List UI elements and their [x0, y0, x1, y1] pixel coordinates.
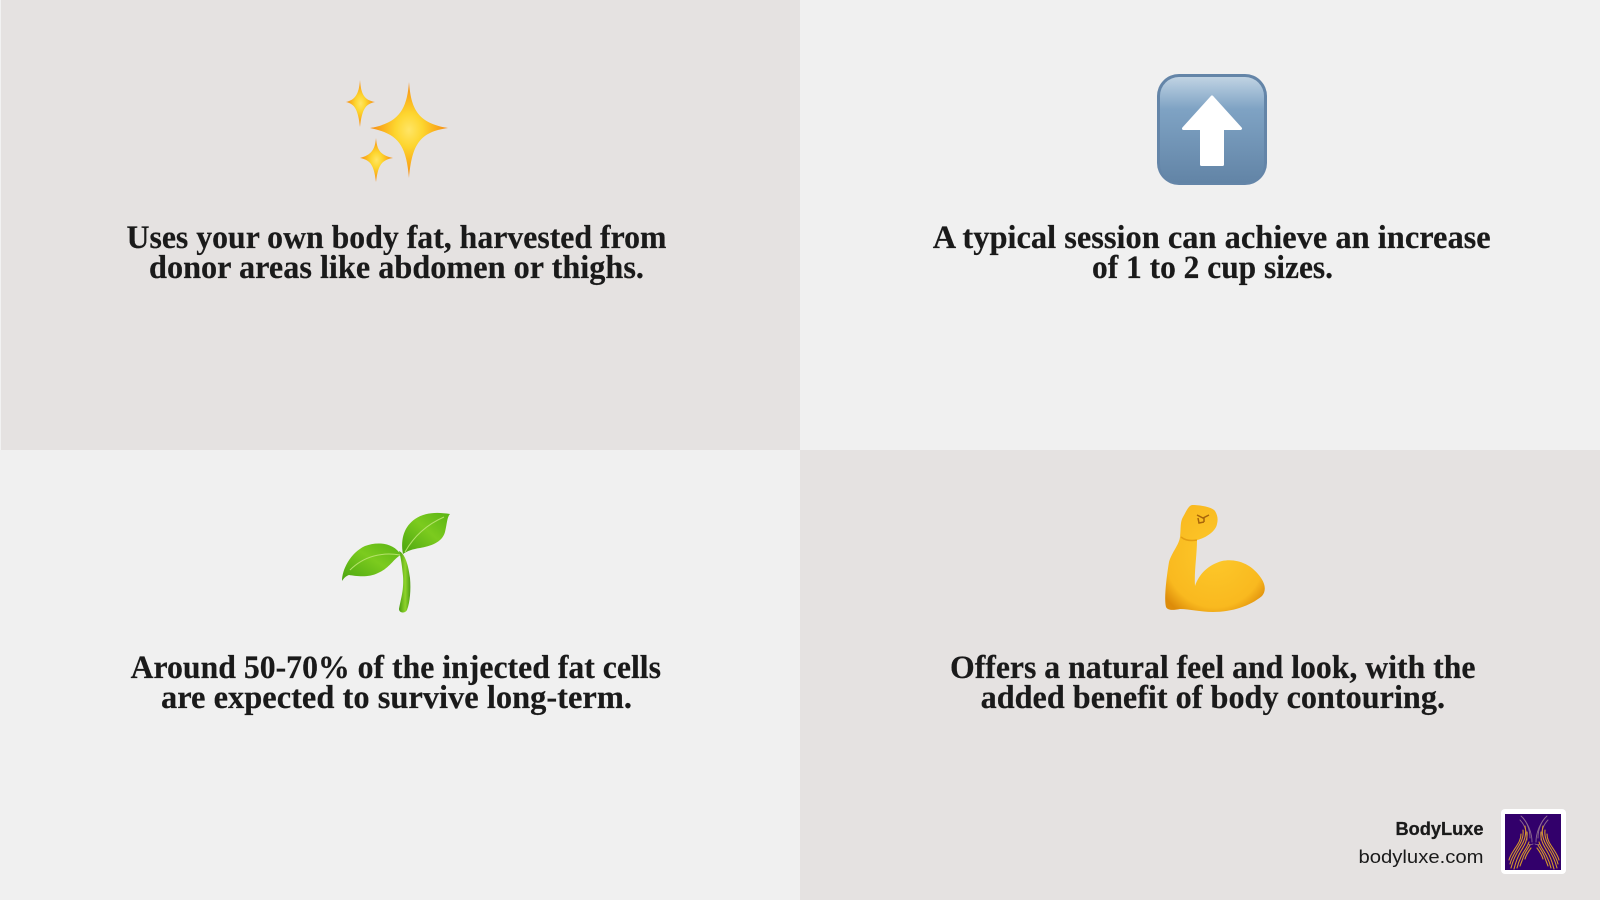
- heading: cup size increase: A typical session can achieve an increase: [933, 220, 1491, 256]
- heading: own body fat: donor areas like abdomen or thighs.: [149, 250, 644, 286]
- heading: own body fat: Uses your own body fat, harvested from: [126, 220, 666, 256]
- icon: seedling: [342, 513, 450, 613]
- logo: golden wings: [1501, 809, 1566, 874]
- heading: fat cell survival: Around 50-70% of the injected fat cells: [131, 650, 661, 686]
- brand url: bodyluxe.com: [1358, 846, 1484, 867]
- panel: cup size increase: [800, 0, 1600, 450]
- icon: sparkles: [346, 80, 448, 182]
- heading: own body fat: [126, 220, 666, 286]
- panel: fat cell survival: [0, 450, 800, 900]
- heading: natural feel: Offers a natural feel and look, with the: [950, 650, 1476, 686]
- panel: natural feel: [800, 450, 1600, 900]
- brand: BodyLuxe: [1358, 809, 1566, 874]
- heading: natural feel: added benefit of body contouring.: [981, 680, 1445, 716]
- icon: flexed biceps: [1165, 505, 1265, 612]
- heading: natural feel: [950, 650, 1476, 716]
- heading: fat cell survival: [131, 650, 661, 716]
- heading: fat cell survival: are expected to survive long-term.: [161, 680, 632, 716]
- brand name: BodyLuxe: [1396, 819, 1484, 839]
- heading: cup size increase: of 1 to 2 cup sizes.: [1092, 250, 1333, 286]
- icon: up arrow: [1157, 74, 1267, 185]
- heading: cup size increase: [933, 220, 1491, 286]
- panel: own body fat: [0, 0, 800, 450]
